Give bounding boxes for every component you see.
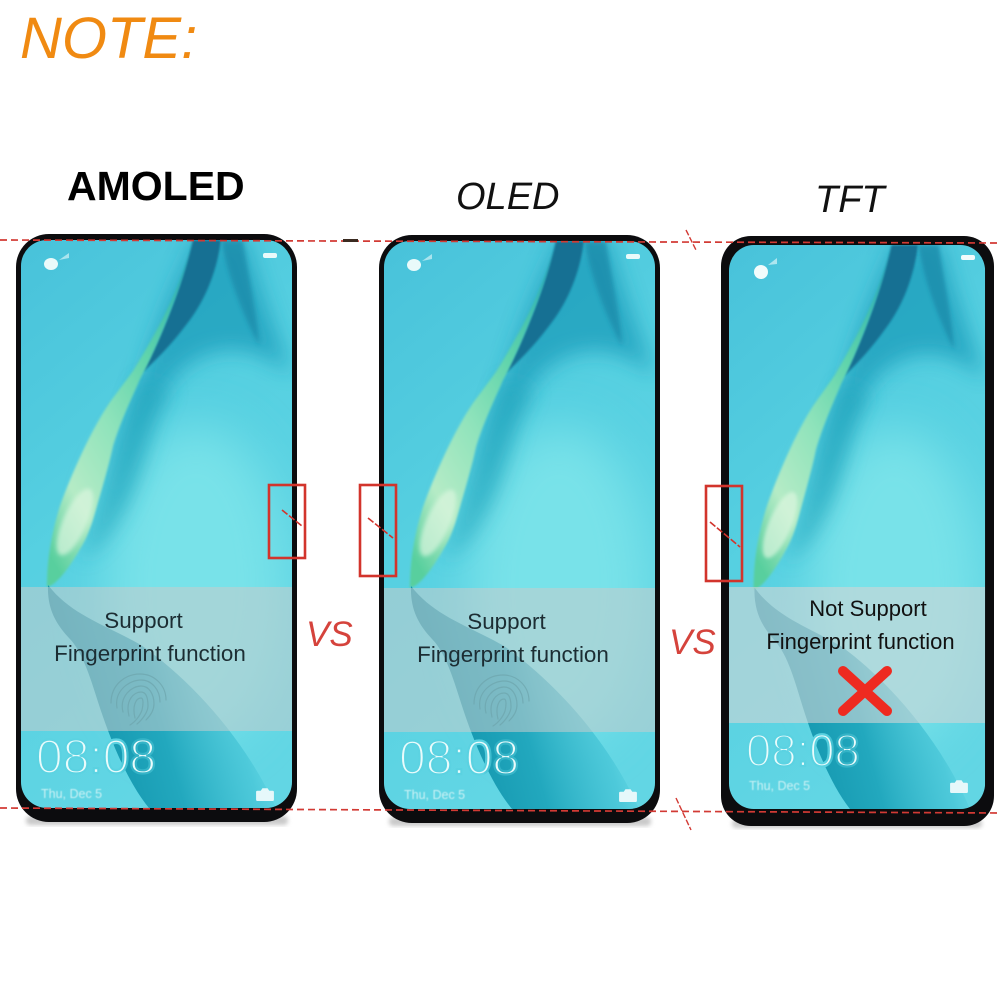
title: NOTE: NOTE: (20, 6, 197, 71)
clock: 08:08 (399, 732, 519, 785)
phone: AMOLED (16, 234, 297, 825)
fingerprint panel: Fingerprint function (417, 642, 609, 667)
VS label 1: VS (306, 615, 353, 654)
icon: red cross (843, 671, 887, 711)
status icons (407, 254, 640, 271)
heading: TFT: TFT (815, 179, 887, 221)
clock: 08:08 (36, 731, 156, 784)
break marks on guide lines (676, 230, 696, 830)
heading: AMOLED: AMOLED (67, 163, 245, 209)
fingerprint panel: Fingerprint function (54, 641, 246, 666)
date: Thu, Dec 5 (41, 787, 102, 801)
clock: 08:08 (746, 725, 860, 776)
status icons (754, 255, 975, 279)
status icons (44, 253, 277, 270)
icon: camera (256, 788, 274, 801)
VS label 2: VS (669, 623, 716, 662)
phone: TFT (721, 236, 994, 828)
top dashed guide line (0, 240, 1000, 243)
fingerprint panel (384, 588, 655, 732)
icon: camera (619, 789, 637, 802)
phone: OLED (379, 235, 660, 826)
fingerprint panel (729, 587, 985, 723)
fingerprint panel: Support (467, 609, 546, 634)
small gap mark (343, 239, 358, 242)
date: Thu, Dec 5 (749, 779, 810, 793)
fingerprint panel: Fingerprint function (766, 629, 955, 654)
heading: OLED: OLED (456, 176, 559, 218)
fingerprint panel (21, 587, 292, 731)
fingerprint panel: Not Support (809, 596, 927, 621)
icon: camera (950, 780, 968, 793)
red box: AMOLED edge (269, 485, 305, 558)
date: Thu, Dec 5 (404, 788, 465, 802)
red box: OLED edge (360, 485, 396, 576)
bottom dashed guide line (0, 808, 1000, 813)
red box: TFT edge (706, 486, 742, 581)
fingerprint panel: Support (104, 608, 183, 633)
